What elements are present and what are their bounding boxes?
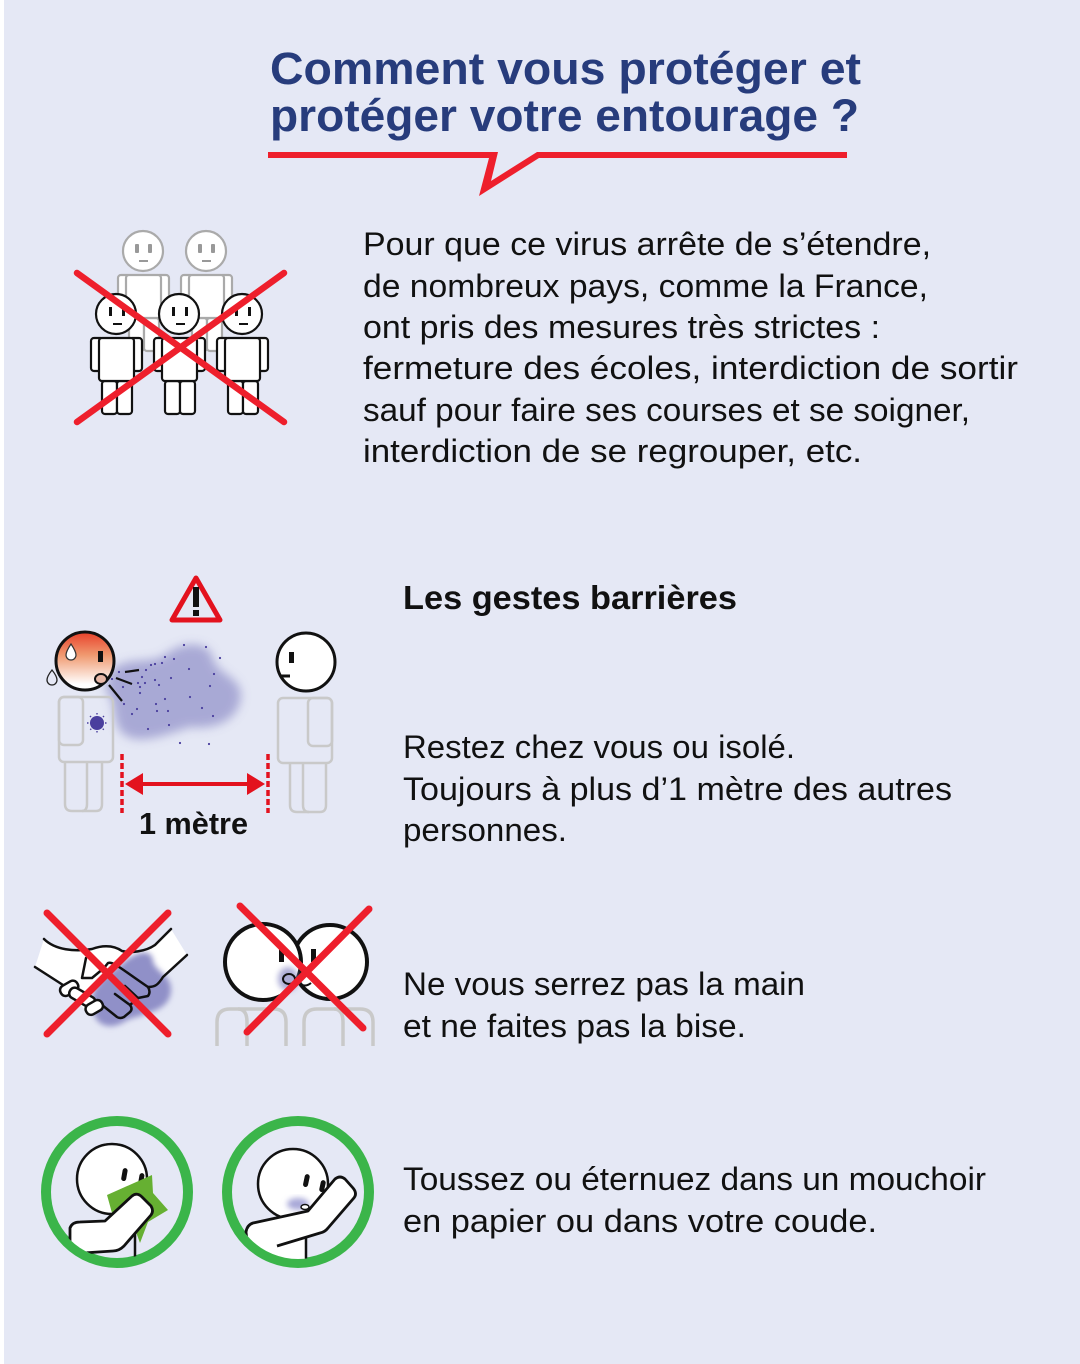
- red cross: [47, 913, 168, 1034]
- distance arrow: [122, 754, 268, 813]
- text: no handshake or kiss: Ne vous serrez pas la main: [403, 966, 805, 1002]
- intro text block: fermeture des écoles, interdiction de sortir: [363, 350, 1018, 386]
- healthy person head: [277, 633, 335, 691]
- icon: kiss crossed out: [217, 906, 373, 1046]
- text: stay home: Restez chez vous ou isolé.: [403, 729, 795, 765]
- illustration: one metre distance: [47, 632, 335, 841]
- virus on chest: [87, 713, 107, 733]
- shoulders: [217, 1009, 373, 1046]
- hands: [35, 929, 187, 1018]
- heading: les gestes barrières: Les gestes barrières: [403, 579, 737, 616]
- droplets: [111, 644, 221, 745]
- intro text block: [363, 226, 1018, 469]
- icon: cough into tissue: [46, 1121, 188, 1263]
- red cross: [240, 906, 369, 1032]
- sick person body: [59, 697, 113, 811]
- text: stay home: [403, 729, 952, 848]
- red cross: [77, 273, 284, 422]
- title speech-bubble underline: [268, 152, 847, 196]
- intro text block: interdiction de se regrouper, etc.: [363, 433, 862, 469]
- healthy person body: [278, 698, 332, 812]
- text: no handshake or kiss: et ne faites pas la bise.: [403, 1008, 746, 1044]
- droplet cloud: [105, 644, 241, 739]
- title: Comment vous protéger et: [270, 43, 861, 94]
- icon: handshake crossed out: [35, 913, 187, 1034]
- icon: crowd crossed out: [77, 231, 284, 422]
- intro text block: de nombreux pays, comme la France,: [363, 268, 928, 304]
- text: cough in tissue or elbow: [403, 1161, 986, 1239]
- heads: [293, 925, 367, 999]
- title: protéger votre entourage ?: [270, 90, 859, 141]
- sneeze lines: [109, 670, 139, 701]
- sick person head: [47, 632, 114, 690]
- icon: cough into elbow: [227, 1121, 369, 1265]
- back row people: [118, 231, 232, 351]
- text: cough in tissue or elbow: Toussez ou éternuez dans un mouchoir: [403, 1161, 986, 1197]
- text: cough in tissue or elbow: en papier ou dans votre coude.: [403, 1203, 877, 1239]
- text: stay home: personnes.: [403, 812, 567, 848]
- text: no handshake or kiss: [403, 966, 805, 1044]
- icon: warning triangle: [172, 578, 220, 620]
- distance label: 1 mètre: [139, 806, 248, 841]
- intro text block: Pour que ce virus arrête de s’étendre,: [363, 226, 931, 262]
- title: [270, 43, 861, 141]
- intro text block: ont pris des mesures très strictes :: [363, 309, 880, 345]
- front row people: [91, 294, 268, 414]
- intro text block: sauf pour faire ses courses et se soigner,: [363, 392, 970, 428]
- text: stay home: Toujours à plus d’1 mètre des autres: [403, 771, 952, 807]
